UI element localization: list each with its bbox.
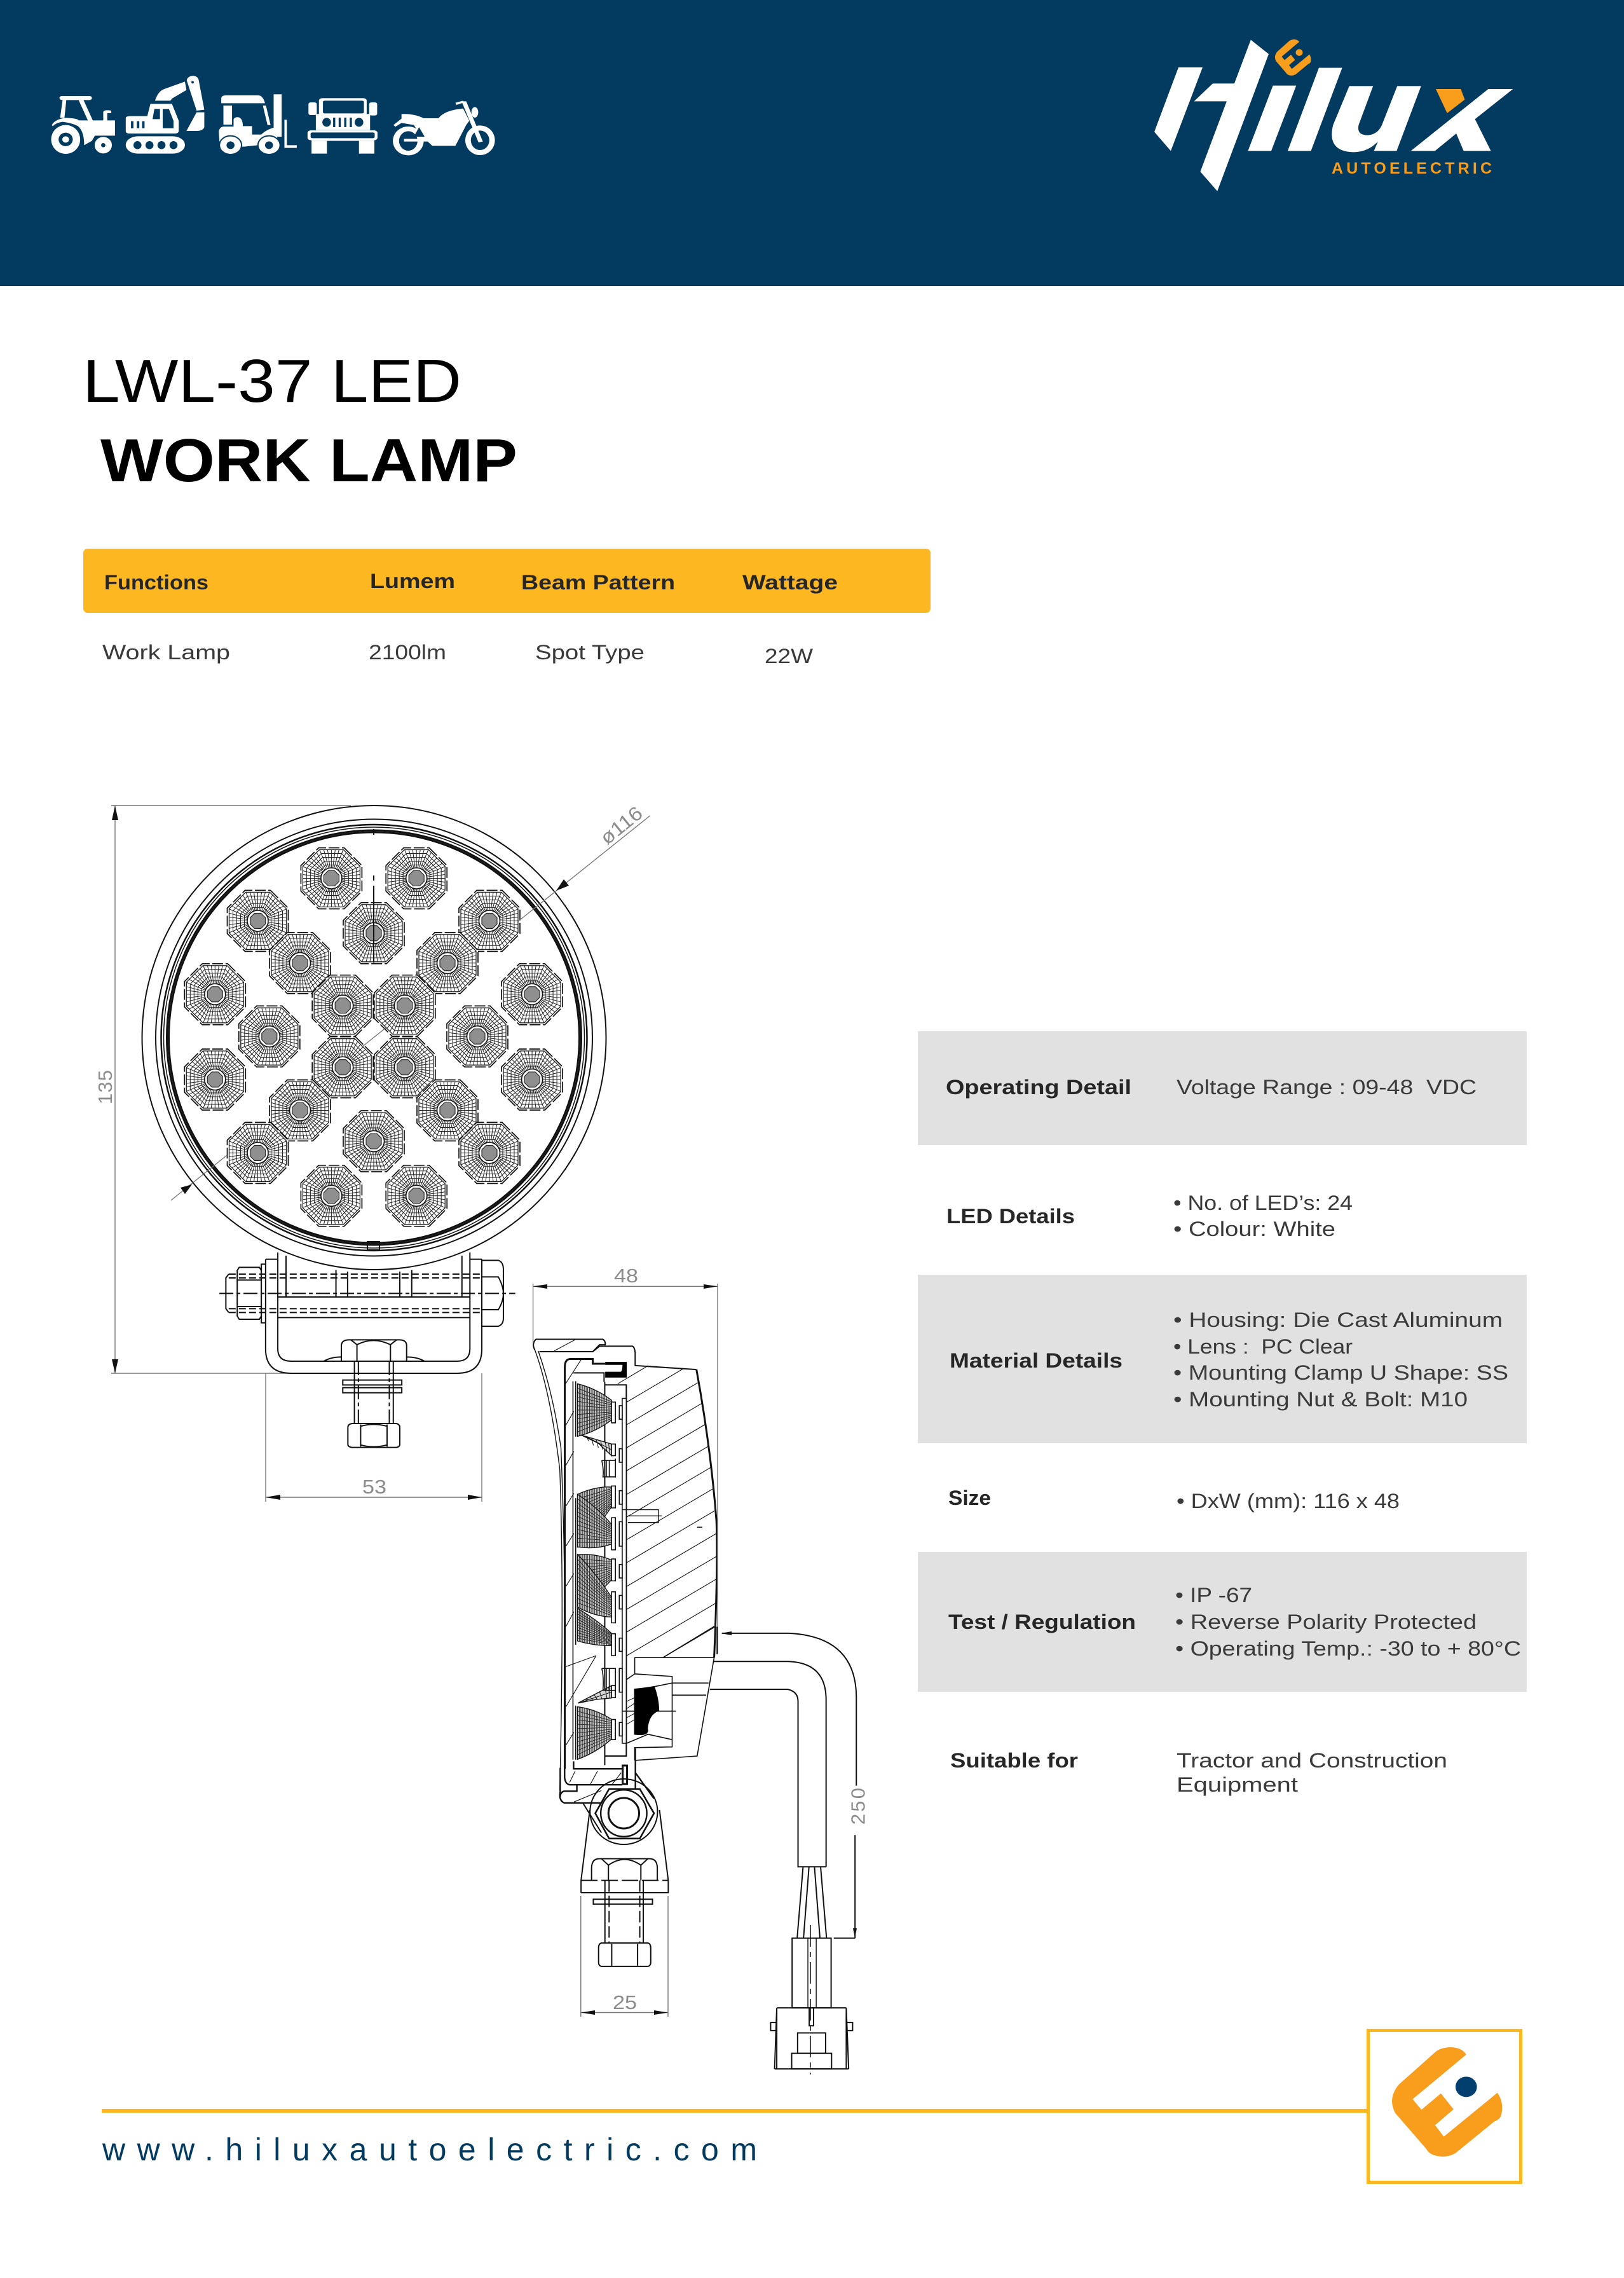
row: material details: • Mounting Nut & Bolt: M10 — [1173, 1388, 1468, 1411]
footer emblem frame — [1368, 2031, 1520, 2182]
value: spot type: Spot Type — [535, 641, 645, 664]
dimension: diameter 116: ø116 — [596, 802, 647, 849]
row: size: Size — [948, 1486, 991, 1509]
U clamp and bolts — [219, 1252, 515, 1448]
icon: forklift — [219, 94, 297, 154]
row: operating detail: Operating Detail — [946, 1076, 1131, 1099]
dimension: depth 48 — [533, 1265, 718, 1653]
LED section reflectors — [578, 1384, 611, 1436]
dimension: depth 48: 48 — [614, 1265, 638, 1287]
header: wattage: Wattage — [742, 571, 838, 594]
row: size — [948, 1486, 1400, 1513]
cable and connector — [710, 1661, 852, 2075]
logo small emblem — [1275, 39, 1311, 76]
row: suitable for — [950, 1749, 1447, 1796]
functions table — [83, 549, 931, 668]
value: 2100lm: 2100lm — [369, 641, 446, 664]
dimension: cable 250 — [717, 1627, 870, 1938]
dimension: width 53 — [266, 1373, 482, 1502]
dimension: cable 250: 250 — [847, 1788, 870, 1825]
row: suitable for: Suitable for — [950, 1749, 1078, 1772]
row: test / regulation — [918, 1552, 1527, 1692]
header band — [0, 0, 1624, 286]
row: material details — [918, 1275, 1527, 1443]
value: 22W: 22W — [765, 645, 814, 668]
row: material details: • Mounting Clamp U Shape: SS — [1173, 1361, 1508, 1384]
header: lumem: Lumem — [370, 570, 455, 593]
logo accent — [1436, 89, 1464, 113]
row: operating detail: Voltage Range : 09-48 VDC — [1177, 1076, 1477, 1099]
footer rule — [102, 2109, 1368, 2113]
value: work lamp: Work Lamp — [102, 641, 230, 664]
housing and lens section — [533, 1339, 717, 1790]
row: LED details — [946, 1191, 1353, 1240]
icon: tractor — [51, 96, 115, 154]
dimension: height 135 — [94, 806, 351, 1373]
footer emblem — [1392, 2047, 1502, 2157]
logo wordmark: AUTOELECTRIC — [1332, 160, 1492, 177]
row: LED details: • Colour: White — [1173, 1218, 1335, 1240]
title — [83, 347, 517, 495]
lamp lower edge, pivot and mount — [560, 1719, 668, 1966]
connector block — [622, 1626, 714, 1760]
title line 1: LWL-37 LED — [83, 347, 461, 415]
icon: excavator — [126, 76, 204, 154]
icon group: vehicle types — [51, 76, 495, 155]
housing hatching — [627, 1369, 716, 1657]
row: suitable for: Tractor and Construction — [1177, 1749, 1447, 1772]
row: LED details: • No. of LED’s: 24 — [1173, 1191, 1353, 1214]
row: test / regulation: Test / Regulation — [948, 1610, 1136, 1633]
header: functions: Functions — [104, 571, 208, 594]
specification table — [918, 1031, 1527, 1796]
row: suitable for: Equipment — [1177, 1773, 1298, 1796]
side section view of lamp — [533, 1265, 870, 2075]
table header bar — [83, 549, 931, 613]
dimension: mount 25: 25 — [613, 1991, 637, 2014]
LED array — [184, 848, 563, 1226]
row: material details: • Housing: Die Cast Aluminum — [1173, 1308, 1503, 1331]
logo letters — [1154, 40, 1513, 191]
dimension: diameter 116 — [171, 802, 650, 1200]
row: size: • DxW (mm): 116 x 48 — [1177, 1490, 1400, 1513]
icon: motorcycle — [393, 100, 495, 155]
row: test / regulation: • IP -67 — [1175, 1584, 1252, 1607]
logo: Hilux Autoelectric — [1154, 40, 1513, 191]
row: material details: Material Details — [950, 1349, 1122, 1372]
lamp body rings — [142, 806, 606, 1270]
icon: jeep — [308, 98, 378, 154]
centre marks — [367, 829, 379, 1250]
row: material details: • Lens : PC Clear — [1173, 1335, 1353, 1358]
title line 2: WORK LAMP — [100, 427, 517, 495]
row: operating detail — [918, 1031, 1527, 1145]
header: beam pattern: Beam Pattern — [521, 571, 675, 594]
row: test / regulation: • Operating Temp.: -30 to + 80°C — [1175, 1637, 1521, 1660]
mounting bracket front view — [219, 1252, 515, 1502]
row: LED details: LED Details — [946, 1205, 1075, 1228]
dimension: mount 25 — [581, 1896, 668, 2017]
row: test / regulation: • Reverse Polarity Protected — [1175, 1610, 1477, 1633]
website address: www.hiluxautoelectric.com — [102, 2132, 757, 2167]
dimension: width 53: 53 — [362, 1476, 386, 1498]
footer — [102, 2031, 1520, 2182]
dimension: height 135: 135 — [94, 1070, 116, 1104]
front view drawing of lamp — [94, 802, 650, 1373]
PCB pads — [611, 1402, 622, 1739]
